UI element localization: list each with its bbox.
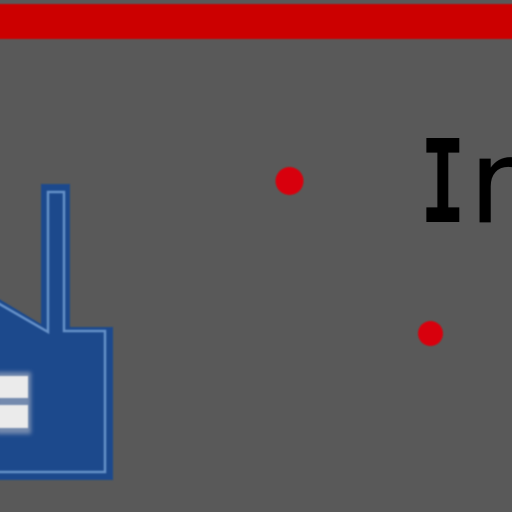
red header bar	[0, 4, 512, 39]
factory body	[0, 184, 113, 480]
red dot upper	[276, 167, 304, 195]
factory window upper	[0, 376, 28, 398]
title text fragment: I	[420, 116, 466, 249]
icon: factory	[0, 184, 113, 480]
factory window shadows	[0, 372, 31, 434]
title text fragment	[420, 116, 512, 250]
red dot lower	[418, 321, 443, 346]
factory window lower	[0, 405, 28, 428]
factory outline highlight	[0, 192, 105, 472]
